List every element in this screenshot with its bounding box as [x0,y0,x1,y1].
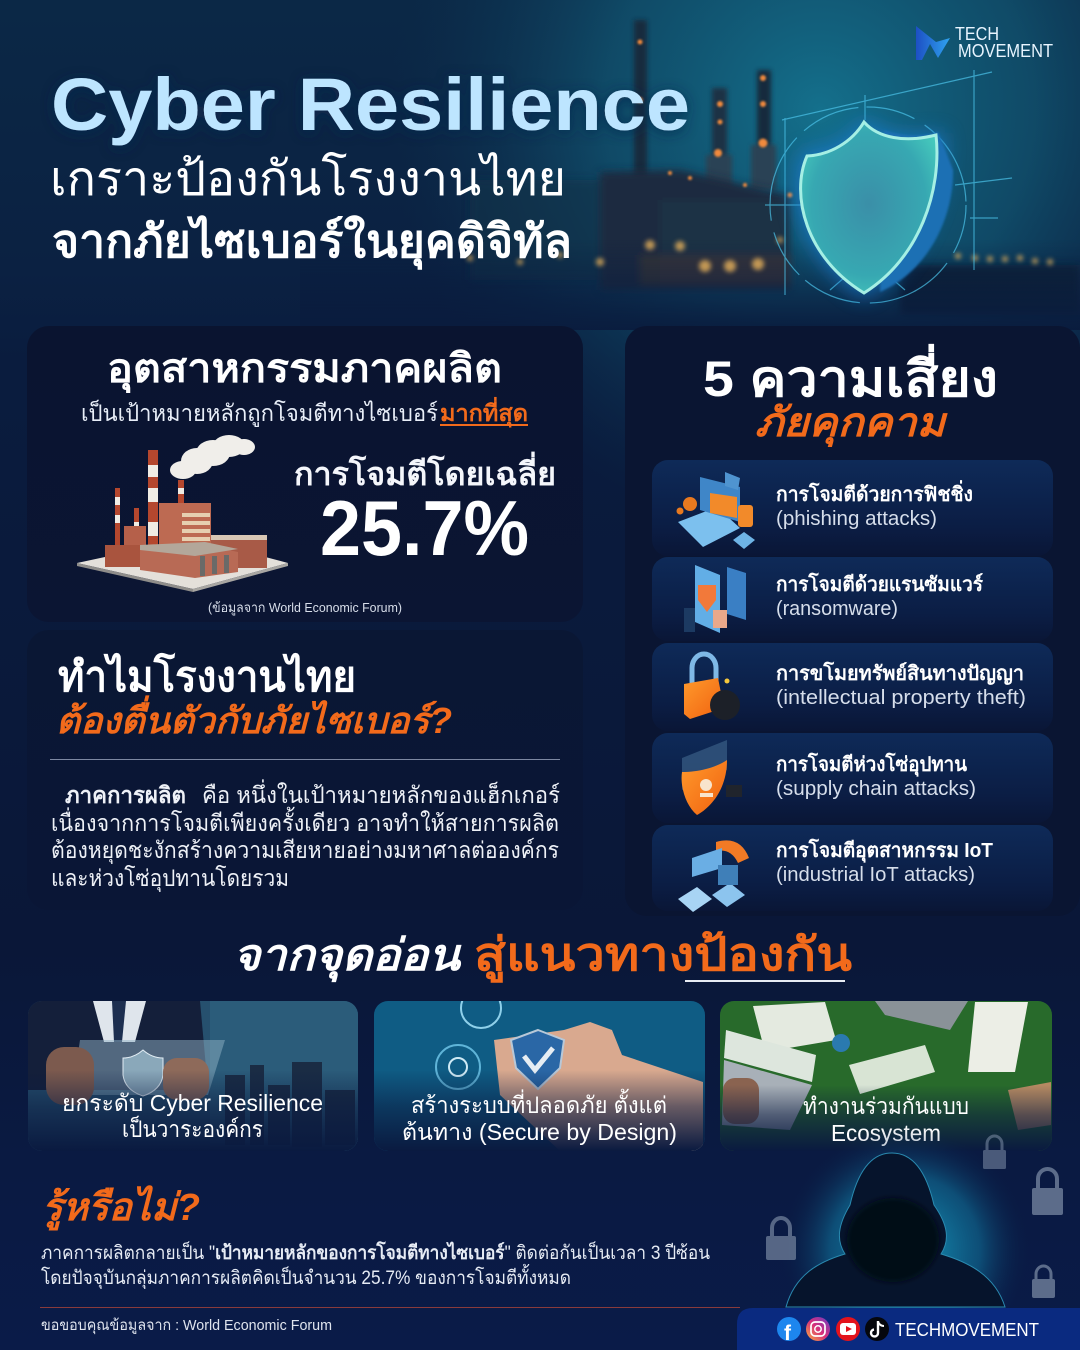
icon: instagram [806,1317,830,1341]
logo: Tech Movement: TECH [955,24,999,44]
did you know block: โดยปัจจุบันกลุ่มภาคการผลิตคิดเป็นจำนวน 25.7% ของการโจมตีทั้งหมด [41,1264,571,1290]
body text [51,779,560,892]
card: ecosystem: Ecosystem [831,1120,941,1146]
card: cyber resilience agenda: ยกระดับ Cyber Resilience [62,1090,323,1116]
footer social bar: TECHMOVEMENT [895,1320,1039,1340]
icon: facebook [777,1317,801,1345]
factory illustration [77,435,288,592]
card: ecosystem [720,1001,1052,1151]
risk 4: supply chain attacks: การโจมตีห่วงโซ่อุปทาน [776,752,967,777]
risk 5: industrial IoT attacks: (industrial IoT attacks) [776,864,975,886]
panel: why Thai factories must be alert [27,630,583,910]
hero: night factory background [300,20,1080,330]
section heading: สู่แนวทางป้องกัน [474,928,853,983]
risks heading [703,344,998,448]
smoke [170,435,255,479]
risk 3: intellectual property theft: (intellectual property theft) [776,687,1026,709]
panel: manufacturing industry statistic: (ข้อมูลจาก World Economic Forum) [208,600,402,616]
did you know block: ภาคการผลิตกลายเป็น "เป้าหมายหลักของการโจมตีทางไซเบอร์" ติดต่อกันเป็นเวลา 3 ปีซ้อน [41,1240,710,1264]
card: cyber resilience agenda: เป็นวาระองค์กร [122,1114,263,1142]
risks heading: ภัยคุกคาม [755,401,948,448]
hacker illustration with locks [766,1125,1063,1350]
risk 1: phishing [652,460,1053,556]
panel: why Thai factories must be alert: ต้องตื่นตัวกับภัยไซเบอร์? [56,695,452,741]
risk 5: industrial IoT attacks [652,825,1053,912]
risk 3: intellectual property theft [652,643,1053,731]
title block: จากภัยไซเบอร์ในยุคดิจิทัล [52,214,572,270]
risk 2: ransomware: (ransomware) [776,598,898,620]
hero: glowing shield [765,70,1012,303]
panel: manufacturing industry statistic [27,326,583,622]
body text: ภาคการผลิต [65,782,186,808]
lock icons [766,1136,1063,1298]
footer social bar [737,1308,1080,1350]
panel: manufacturing industry statistic: 25.7% [320,484,529,572]
did you know block [41,1185,710,1290]
body text: เนื่องจากการโจมตีเพียงครั้งเดียว อาจทำให้สายการผลิต [51,807,559,836]
panel: manufacturing industry statistic: อุตสาหกรรมภาคผลิต [107,347,502,394]
panel: manufacturing industry statistic: มากที่สุด [440,396,528,428]
icon: tiktok [865,1317,889,1341]
panel: why Thai factories must be alert: ทำไมโรงงานไทย [58,652,356,700]
did you know block: รู้หรือไม่? [42,1185,200,1231]
panel: manufacturing industry statistic: เป็นเป้าหมายหลักถูกโจมตีทางไซเบอร์ [81,398,438,427]
risk 1: phishing: การโจมตีด้วยการฟิชชิ่ง [776,479,973,506]
risk 1: phishing: (phishing attacks) [776,508,937,530]
risk 4: supply chain attacks: (supply chain attacks) [776,778,976,800]
card: secure by design: สร้างระบบที่ปลอดภัย ตั้งแต่ [411,1089,667,1118]
risk 2: ransomware: การโจมตีด้วยแรนซัมแวร์ [776,572,983,596]
panel: manufacturing industry statistic: การโจมตีโดยเฉลี่ย [294,451,556,492]
card: secure by design: ต้นทาง (Secure by Design) [402,1119,677,1145]
title block: เกราะป้องกันโรงงานไทย [50,151,566,206]
risks heading: 5 ความเสี่ยง [703,344,998,407]
footer credit: ขอขอบคุณข้อมูลจาก : World Economic Forum [41,1317,332,1335]
card: cyber resilience agenda [28,1001,358,1151]
risk 2: ransomware [652,557,1053,641]
logo: Tech Movement [916,24,1053,61]
section heading: จากจุดอ่อน [233,931,462,983]
body text: ต้องหยุดชะงักสร้างความเสียหายอย่างมหาศาลต่อองค์กร [51,837,559,864]
icon: youtube [836,1317,860,1341]
section heading [233,928,853,983]
card: ecosystem: ทำงานร่วมกันแบบ [803,1093,969,1119]
risk 4: supply chain attacks [652,733,1053,823]
title block: Cyber Resilience [51,63,690,146]
logo: Tech Movement: MOVEMENT [958,41,1053,61]
risk 3: intellectual property theft: การขโมยทรัพย์สินทางปัญญา [776,661,1024,685]
title block [50,63,690,270]
body text: และห่วงโซ่อุปทานโดยรวม [51,865,289,892]
panel: five risks [625,326,1080,916]
logo mark [916,26,950,60]
card: secure by design [374,988,705,1151]
body text: คือ หนึ่งในเป้าหมายหลักของแฮ็กเกอร์ [202,779,560,808]
icon: facebook: f [784,1322,792,1345]
risk 5: industrial IoT attacks: การโจมตีอุตสาหกรรม IoT [776,838,993,863]
